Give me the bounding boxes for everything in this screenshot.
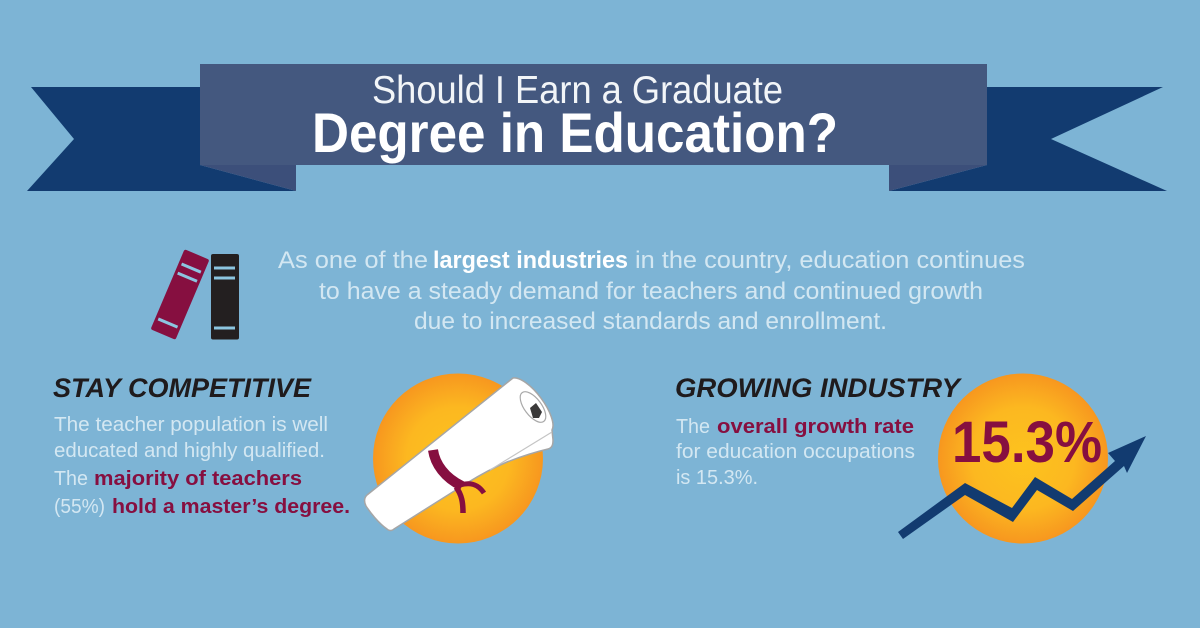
- body text: stay competitive: The teacher population is well: [54, 414, 328, 436]
- body text: stay competitive: majority of teachers: [94, 468, 302, 490]
- scroll end opening: [515, 388, 551, 426]
- orange circle: [373, 374, 543, 544]
- body text: growing industry: The: [676, 416, 710, 438]
- orange circle: [938, 374, 1108, 544]
- intro paragraph: largest industries: [433, 247, 628, 274]
- title line 1: Should I Earn a Graduate: [372, 69, 783, 112]
- ribbon right tail: [889, 87, 1167, 191]
- body text: stay competitive: [54, 414, 350, 518]
- scroll inner edge line: [490, 432, 552, 470]
- title line 2: Degree in Education?: [312, 101, 838, 164]
- statistic: 15.3%: 15.3%: [952, 410, 1102, 475]
- diploma scroll: [365, 378, 553, 530]
- ribbon tie: [433, 450, 484, 513]
- intro paragraph: [278, 247, 1025, 335]
- heading: stay competitive: STAY COMPETITIVE: [53, 373, 312, 403]
- body text: stay competitive: educated and highly qualified.: [54, 440, 325, 462]
- body text: stay competitive: The: [54, 468, 88, 490]
- body text: growing industry: for education occupations: [676, 441, 915, 463]
- scroll body and curl: [365, 378, 553, 530]
- ribbon main panel: [200, 64, 987, 165]
- body text: growing industry: [676, 416, 915, 489]
- title banner: [27, 64, 1167, 191]
- body text: growing industry: is 15.3%.: [676, 467, 758, 489]
- body text: growing industry: overall growth rate: [717, 416, 914, 438]
- ribbon right fold: [889, 165, 987, 191]
- black book: [211, 254, 239, 340]
- ribbon left tail: [27, 87, 296, 191]
- icon: books: [151, 249, 239, 340]
- panel: growing industry: [675, 373, 1146, 544]
- scroll inner shadow: [530, 403, 542, 418]
- body text: stay competitive: hold a master’s degree.: [112, 496, 350, 518]
- arrow: growth line: [898, 436, 1146, 539]
- panel: stay competitive: [53, 373, 553, 544]
- intro paragraph: As one of the: [278, 247, 428, 274]
- ribbon left fold: [200, 165, 296, 191]
- heading: growing industry: GROWING INDUSTRY: [675, 373, 963, 403]
- intro paragraph: to have a steady demand for teachers and continued growth: [319, 278, 983, 305]
- icon: orange circle with diploma: [365, 374, 553, 544]
- intro paragraph: in the country, education continues: [635, 247, 1025, 274]
- intro paragraph: due to increased standards and enrollment.: [414, 308, 887, 335]
- body text: stay competitive: (55%): [54, 496, 105, 518]
- maroon book: [151, 249, 209, 340]
